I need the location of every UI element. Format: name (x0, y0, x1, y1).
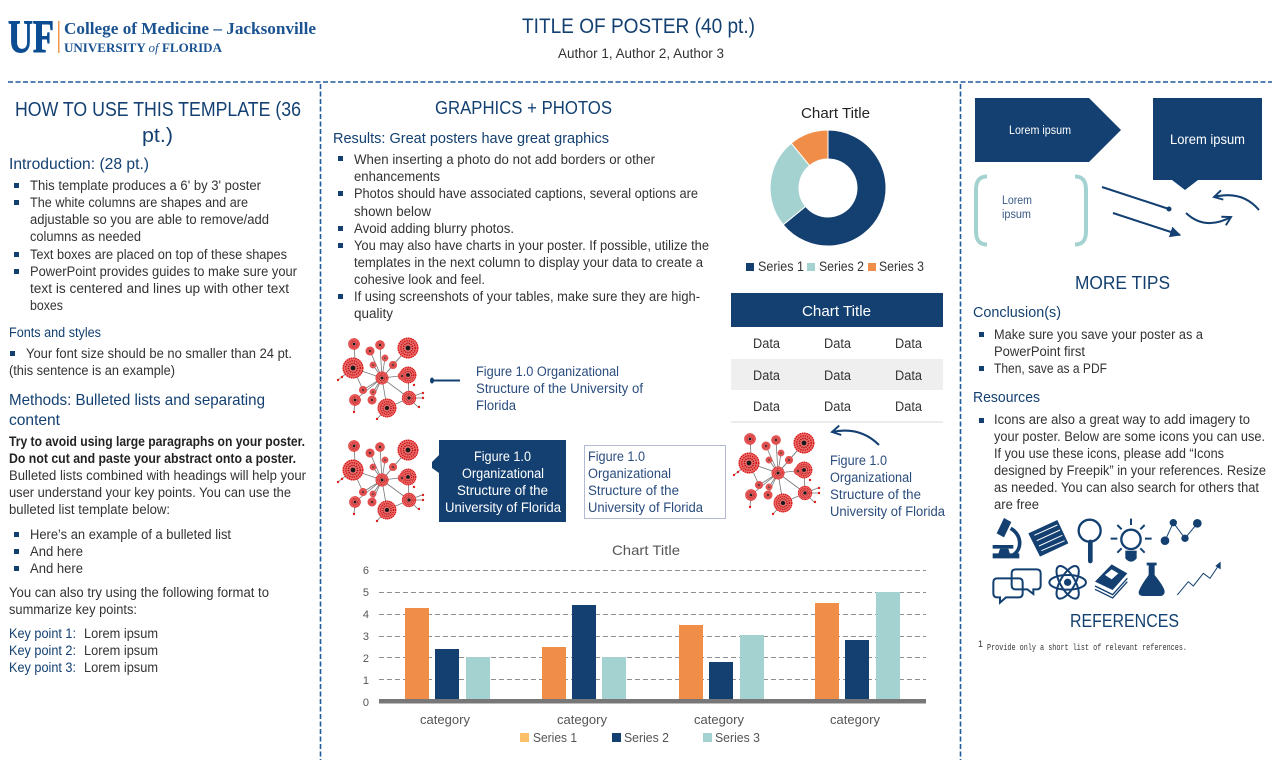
bullet list: example (14, 527, 231, 576)
bullet list: results: If using screenshots of your tables, make sure they are high- (354, 289, 700, 304)
key points: Lorem ipsum (84, 660, 158, 675)
heading: more tips: MORE TIPS (1075, 273, 1170, 293)
bullet list: results: shown below (354, 204, 431, 219)
callout: figure caption navy (432, 440, 566, 522)
bullet list: resources: If you use these icons, please add “Icons (994, 446, 1224, 461)
caption: figure 1: Structure of the University of (476, 381, 643, 396)
shape: pentagon arrow (975, 98, 1121, 162)
table cells: Data (895, 368, 922, 383)
shape: bracket text: Lorem (1002, 195, 1032, 207)
caption: figure 1: Figure 1.0 Organizational (476, 364, 619, 379)
callout: figure caption navy: Organizational (462, 466, 544, 481)
caption: figure 3: Figure 1.0 (830, 453, 887, 468)
bullet list: introduction (14, 178, 297, 313)
bullet list: resources: are free (994, 497, 1039, 512)
subheading: results: Results: Great posters have great graphics (333, 130, 609, 147)
bullet list: results: You may also have charts in your poster. If possible, utilize the (354, 238, 709, 253)
text: avoid large paragraphs: Do not cut and paste your abstract onto a poster. (9, 451, 296, 466)
icon: flask (1139, 563, 1165, 596)
donut chart (746, 105, 924, 274)
key points: Lorem ipsum (84, 643, 158, 658)
table cells: Data (824, 399, 851, 414)
text: font size note (9, 346, 292, 378)
callout: figure caption navy: Figure 1.0 (474, 449, 531, 464)
reference note: Provide only a short list of relevant references. (987, 643, 1187, 653)
bar chart legend: Series 1 (533, 730, 577, 745)
heading: methods: content (9, 412, 61, 429)
logo: University of Florida (8, 11, 316, 63)
bullet list: conclusions: Make sure you save your poster as a (994, 327, 1203, 342)
key points: Key point 2: (9, 643, 76, 658)
bullet list: introduction: Text boxes are placed on top of these shapes (30, 247, 287, 262)
heading: graphics + photos: GRAPHICS + PHOTOS (435, 98, 612, 118)
data table (731, 293, 943, 422)
donut legend: Series 3 (879, 259, 924, 274)
bullet list: example: And here (30, 561, 83, 576)
shape: pentagon arrow: Lorem ipsum (1009, 125, 1071, 137)
bullet list: results: When inserting a photo do not add borders or other (354, 152, 655, 167)
bullet list: conclusions: Then, save as a PDF (994, 361, 1107, 376)
icon: atom (1049, 563, 1086, 602)
bullet list: introduction: PowerPoint provides guides to make sure your (30, 264, 297, 279)
caption: figure 3: University of Florida (830, 504, 945, 519)
table cells: Data (753, 336, 780, 351)
bullet list: results: templates in the next column to display your data to create a (354, 255, 703, 270)
arrow: curved left (1214, 195, 1259, 210)
text: summary format: You can also try using the following format to (9, 585, 269, 600)
icon: magnifier (1079, 520, 1101, 561)
table cells: Data (824, 368, 851, 383)
heading: methods: Methods: Bulleted lists and separating (9, 392, 265, 409)
bullet list: introduction: The white columns are shapes and are (30, 195, 248, 210)
icon: notepad (1028, 520, 1068, 557)
bullet list: results (338, 152, 709, 321)
table header (731, 293, 943, 327)
logo mark UF: UF (8, 11, 54, 63)
text: avoid large paragraphs: Try to avoid using large paragraphs on your poster. (9, 434, 305, 449)
icon: books (1095, 564, 1127, 598)
arrow: straight (1113, 213, 1180, 235)
panel: how to use this template (9, 99, 306, 675)
figure: network 1 (337, 338, 424, 420)
callout: figure caption navy: University of Florida (445, 500, 561, 515)
shape: bracket text (976, 176, 1086, 244)
category labels: category (420, 712, 470, 727)
icon: speech bubbles (993, 569, 1041, 603)
bullet list: example: Here’s an example of a bulleted list (30, 527, 231, 542)
text: avoid large paragraphs: user understand your key points. You can use the (9, 485, 291, 500)
data table: Chart Title (802, 303, 871, 320)
icon: pointer line (430, 378, 460, 384)
bar chart title: Chart Title (612, 542, 680, 558)
bars: series 2 (435, 605, 869, 700)
shape: bracket text: ipsum (1002, 209, 1031, 221)
bullet list: conclusions: PowerPoint first (994, 344, 1085, 359)
icon: microscope (993, 518, 1020, 558)
bullet list: resources (979, 412, 1266, 512)
key points: Key point 1: (9, 626, 76, 641)
axis labels: 1 (363, 675, 369, 687)
text: summary format (9, 585, 269, 617)
donut legend (746, 259, 924, 274)
category labels: category (830, 712, 880, 727)
bar chart legend (520, 730, 760, 745)
reference note (978, 639, 1187, 653)
caption: figure 3: Structure of the (830, 487, 921, 502)
bullet list: results: enhancements (354, 169, 440, 184)
icon: light bulb (1111, 519, 1152, 562)
figure: network 2 (337, 440, 424, 522)
title: TITLE OF POSTER (40 pt.) (522, 15, 755, 38)
logo divider (58, 21, 60, 53)
bullet list: resources: Icons are also a great way to add imagery to (994, 412, 1250, 427)
bullet list: results: Photos should have associated captions, several options are (354, 186, 698, 201)
icon: line graph (1161, 519, 1202, 545)
axis labels: 4 (363, 609, 369, 621)
authors: Author 1, Author 2, Author 3 (558, 46, 724, 61)
donut legend: Series 1 (758, 259, 804, 274)
bullet list: resources: your poster. Below are some icons you can use. (994, 429, 1265, 444)
axis labels (363, 565, 369, 709)
bullet list: results: cohesive look and feel. (354, 272, 485, 287)
table cells: Data (824, 336, 851, 351)
key points: Key point 3: (9, 660, 76, 675)
axis labels: 0 (363, 697, 369, 709)
university name: UNIVERSITY of FLORIDA (64, 40, 223, 55)
bullet list: introduction: This template produces a 6' by 3' poster (30, 178, 261, 193)
axis labels: 6 (363, 565, 369, 577)
bullet list: example: And here (30, 544, 83, 559)
bullet list: resources: designed by Freepik” in your references. Resize (994, 463, 1266, 478)
bullet list: conclusions (979, 327, 1203, 376)
category labels (420, 712, 880, 727)
caption: figure 3 (830, 453, 945, 519)
caption box: outlined (584, 446, 726, 518)
text: font size note: Your font size should be no smaller than 24 pt. (26, 346, 292, 361)
college name: College of Medicine – Jacksonville (64, 19, 316, 38)
table cells: Data (753, 368, 780, 383)
category labels: category (557, 712, 607, 727)
bars: series 3 (466, 592, 900, 700)
panel: graphics and photos (333, 98, 945, 745)
shape: down callout (1153, 98, 1262, 190)
heading: how to use: pt.) (142, 125, 173, 147)
panel: more tips (973, 98, 1266, 653)
shape: down callout: Lorem ipsum (1170, 131, 1245, 147)
table cells: Data (895, 336, 922, 351)
axis labels: 2 (363, 653, 369, 665)
caption box: outlined: Structure of the (588, 483, 679, 498)
bullet list: introduction: columns as needed (30, 229, 141, 244)
caption: figure 1 (476, 364, 643, 413)
arrow: curved right (1186, 213, 1231, 223)
axis labels: 3 (363, 631, 369, 643)
heading: how to use (15, 99, 301, 147)
table cells (753, 336, 922, 414)
bar chart legend: Series 3 (715, 730, 760, 745)
bar chart legend: Series 2 (624, 730, 669, 745)
axis labels: 5 (363, 587, 369, 599)
icon: trend arrow (1177, 562, 1221, 595)
heading: references: REFERENCES (1070, 611, 1179, 631)
caption: figure 3: Organizational (830, 470, 912, 485)
reference note: 1 (978, 639, 983, 649)
bullet list: introduction: adjustable so you are able to remove/add (30, 212, 269, 227)
text: avoid large paragraphs: bulleted list template below: (9, 502, 170, 517)
heading: methods (9, 392, 265, 429)
icon: curved arrow (832, 431, 879, 445)
heading: resources: Resources (973, 389, 1040, 406)
donut chart title: Chart Title (801, 105, 870, 122)
text: avoid large paragraphs (9, 434, 306, 517)
key points: Lorem ipsum (84, 626, 158, 641)
bullet list: results: quality (354, 306, 393, 321)
donut slices (770, 130, 886, 246)
caption: figure 1: Florida (476, 398, 516, 413)
caption box: outlined: University of Florida (588, 500, 703, 515)
text: avoid large paragraphs: Bulleted lists combined with headings will help your (9, 468, 306, 483)
bullet list: introduction: text is centered and lines up with other text (30, 281, 289, 296)
heading: how to use: HOW TO USE THIS TEMPLATE (36 (15, 99, 301, 121)
icon set (993, 518, 1221, 603)
bullet list: resources: as needed. You can also search for others that (994, 480, 1259, 495)
arrow: oval end (1102, 187, 1172, 212)
caption box: outlined: Organizational (588, 466, 671, 481)
donut legend: Series 2 (819, 259, 864, 274)
key points (9, 626, 158, 675)
table cells: Data (753, 399, 780, 414)
heading: conclusions: Conclusion(s) (973, 304, 1061, 321)
figure: network 3 (733, 433, 820, 515)
bars: series 1 (405, 603, 839, 700)
bullet list: results: Avoid adding blurry photos. (354, 221, 514, 236)
callout: figure caption navy: Structure of the (457, 483, 548, 498)
caption box: outlined: Figure 1.0 (588, 449, 645, 464)
heading: fonts and styles: Fonts and styles (9, 325, 101, 340)
bullet list: introduction: boxes (30, 298, 63, 313)
bar chart (363, 542, 926, 745)
table cells: Data (895, 399, 922, 414)
text: summary format: summarize key points: (9, 602, 137, 617)
heading: introduction: Introduction: (28 pt.) (9, 156, 149, 173)
category labels: category (694, 712, 744, 727)
text: font size note: (this sentence is an example) (9, 363, 175, 378)
